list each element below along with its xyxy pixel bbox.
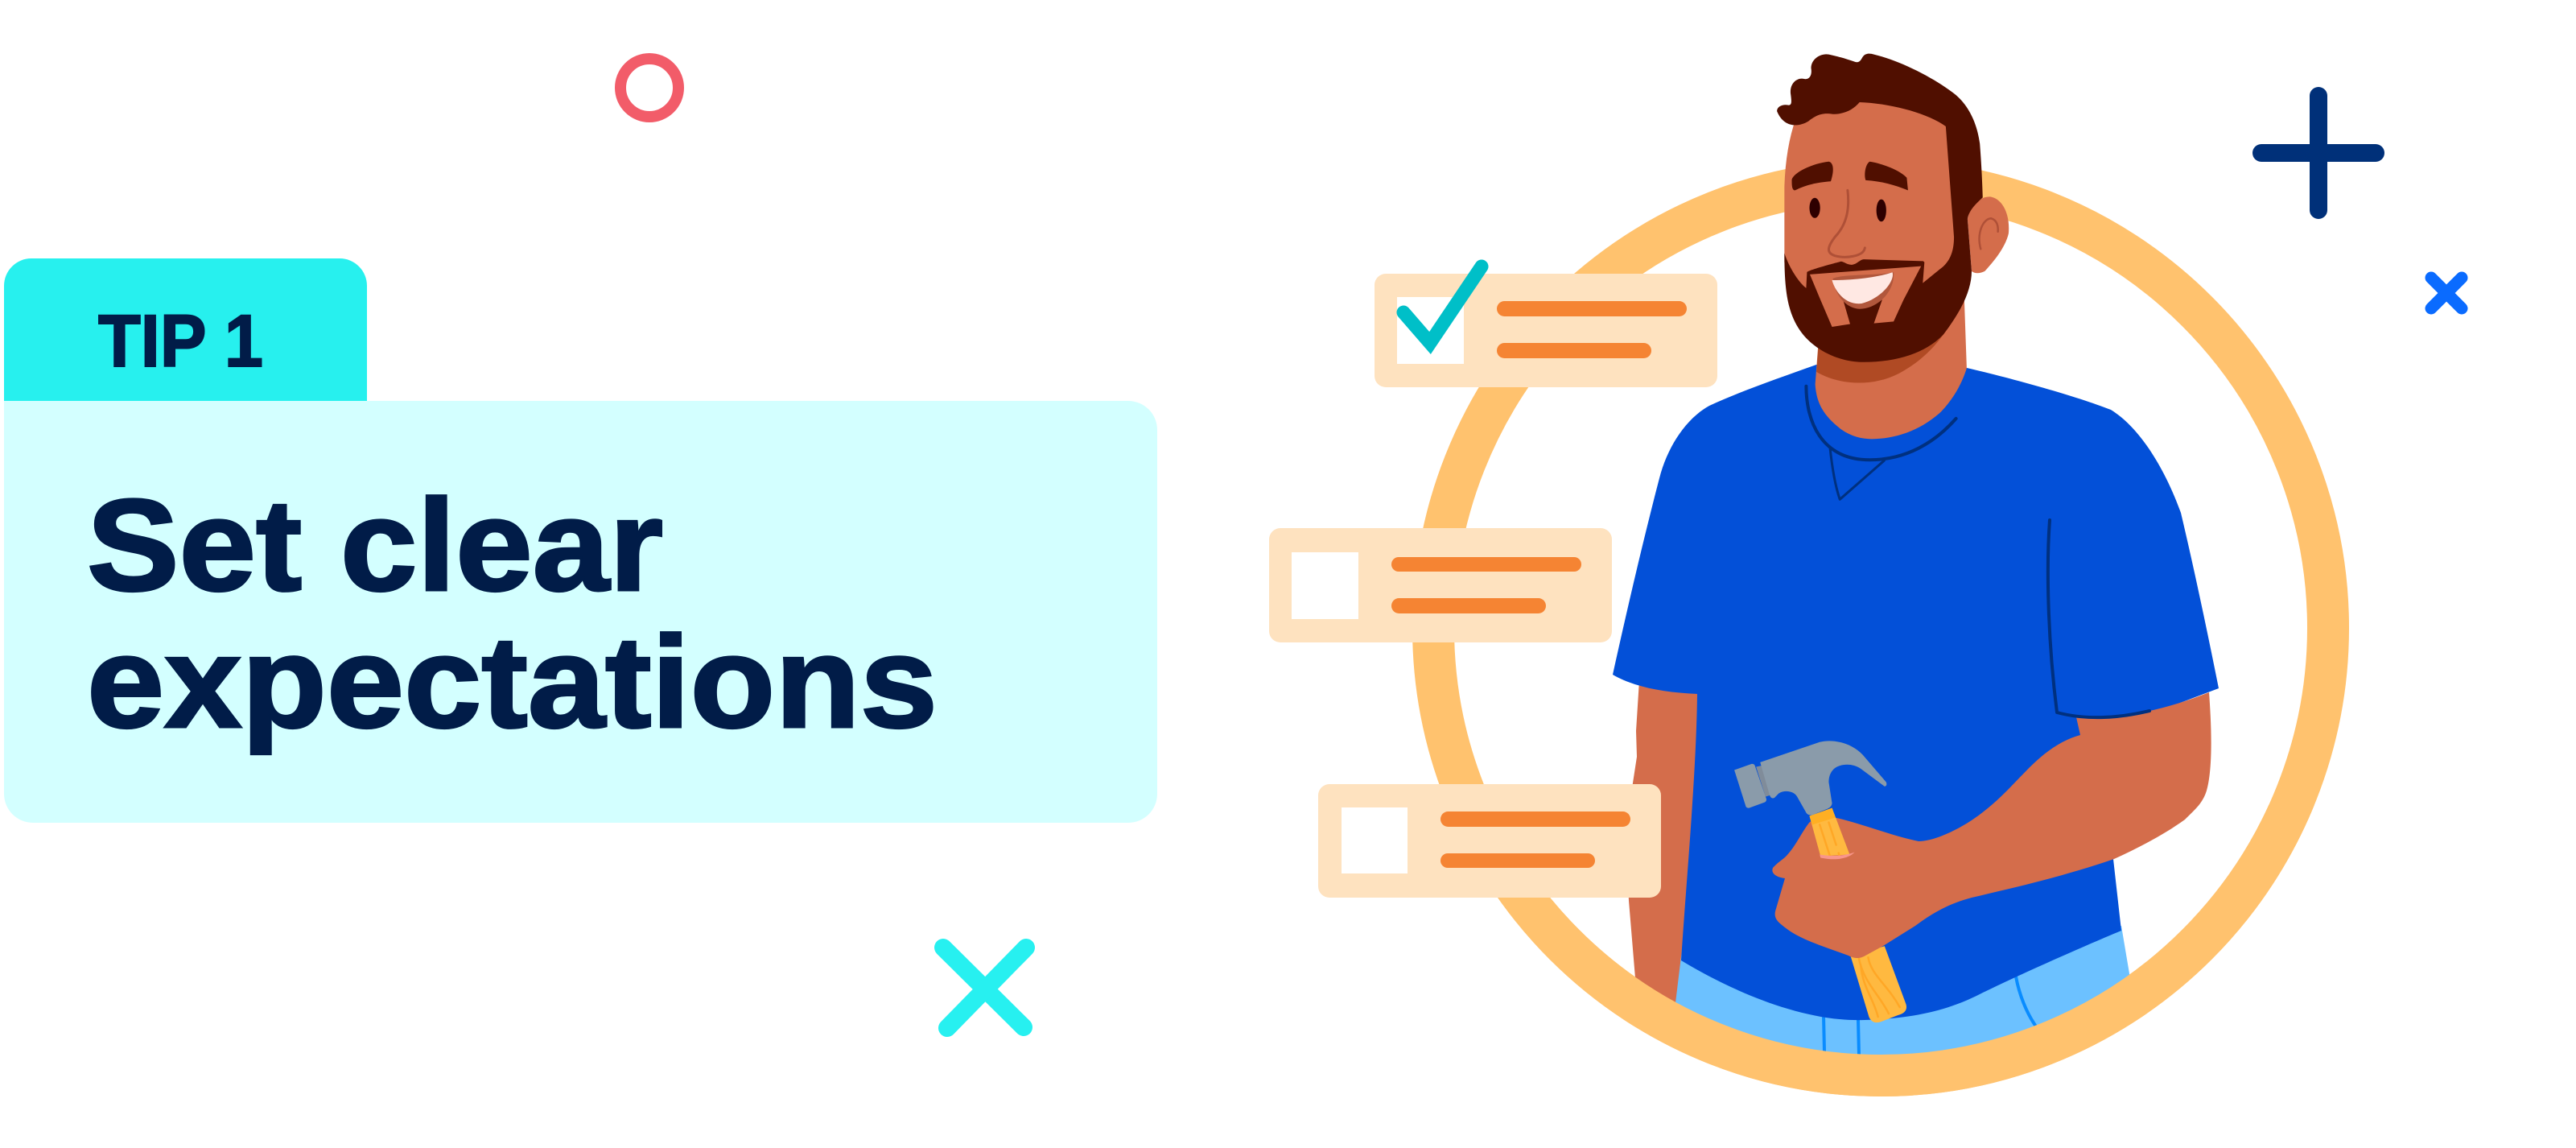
hammer handle lower — [1850, 946, 1906, 1022]
hair and beard — [1777, 54, 1983, 362]
icon: check mark — [1403, 266, 1482, 343]
neck — [1816, 298, 1967, 439]
face — [1784, 93, 1964, 295]
placket — [1830, 448, 1884, 499]
hammer handle upper — [1809, 808, 1849, 856]
icon: blue cross — [2431, 278, 2462, 308]
jeans stitching — [1824, 977, 2036, 1055]
orange ring lower overlay — [1498, 805, 2314, 1096]
t-shirt — [1613, 365, 2219, 1020]
heading line 1: Set clear — [87, 473, 663, 618]
hammer neck — [1756, 766, 1770, 797]
nose — [1828, 190, 1865, 257]
icon: navy plus — [2261, 96, 2376, 210]
ear — [1968, 196, 2009, 273]
heading panel — [4, 401, 1157, 823]
heading line 2: expectations — [87, 609, 938, 755]
right arm and hand — [1772, 692, 2211, 958]
teeth — [1832, 272, 1893, 304]
mouth surround — [1810, 266, 1921, 327]
handle grain — [1820, 823, 1840, 857]
orange ring — [1433, 180, 2328, 1076]
inner ear — [1980, 218, 1998, 249]
checklist card 3 — [1318, 784, 1661, 898]
collar — [1806, 386, 1956, 460]
tip label: TIP 1 — [98, 300, 263, 382]
hammer face — [1734, 764, 1766, 808]
finger nail — [1820, 853, 1855, 859]
neck shadow — [1816, 327, 1943, 383]
checklist card 2 — [1269, 528, 1612, 642]
right eyebrow — [1865, 162, 1908, 190]
head — [1777, 54, 2009, 499]
left eye — [1809, 198, 1820, 218]
checklist card 1 — [1375, 266, 1717, 387]
left eyebrow — [1792, 162, 1833, 190]
right eye — [1877, 200, 1886, 221]
tip tab — [4, 258, 367, 401]
hammer upper — [1734, 741, 1886, 859]
icon: red ring — [620, 59, 678, 117]
hammer head and claw — [1760, 741, 1886, 816]
icon: cyan cross — [943, 948, 1026, 1028]
jeans — [1674, 926, 2134, 1069]
mouth — [1833, 272, 1894, 309]
panel: tip heading card — [4, 258, 1157, 823]
sleeve hem line — [2048, 520, 2149, 717]
handle band — [1809, 808, 1836, 824]
left arm — [1626, 680, 1710, 1022]
illustration: man with hammer — [1613, 54, 2219, 1069]
